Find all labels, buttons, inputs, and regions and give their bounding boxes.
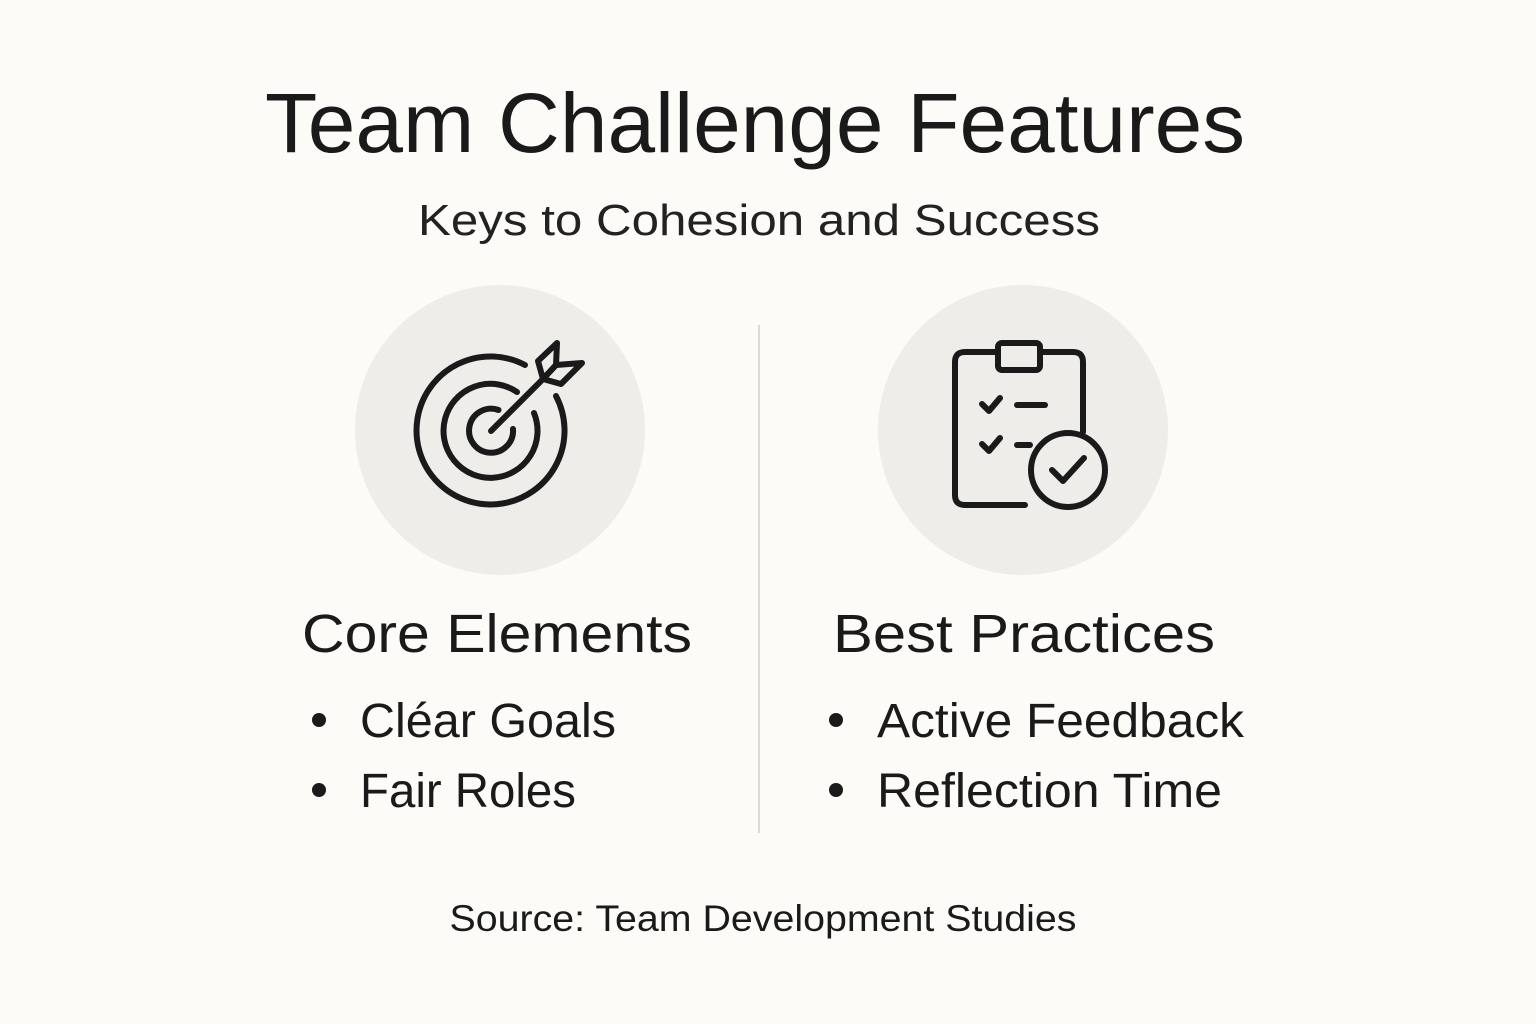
list: best practices — [829, 695, 1245, 818]
list: core elements: Fair Roles — [360, 765, 576, 818]
panel: best practices — [829, 285, 1245, 818]
list: best practices: Active Feedback — [877, 695, 1245, 748]
subtitle: Keys to Cohesion and Success — [418, 196, 1100, 245]
icon: target — [355, 285, 645, 575]
panel: core elements — [302, 285, 692, 818]
icon: clipboard — [878, 285, 1168, 575]
list: core elements: Cléar Goals — [360, 695, 616, 748]
title: Team Challenge Features — [265, 76, 1245, 170]
list: core elements — [312, 695, 616, 818]
heading: Best Practices: Best Practices — [833, 604, 1215, 664]
list: best practices: Reflection Time — [877, 765, 1222, 818]
source: Source: Team Development Studies — [450, 898, 1076, 939]
heading: Core Elements: Core Elements — [302, 604, 692, 664]
